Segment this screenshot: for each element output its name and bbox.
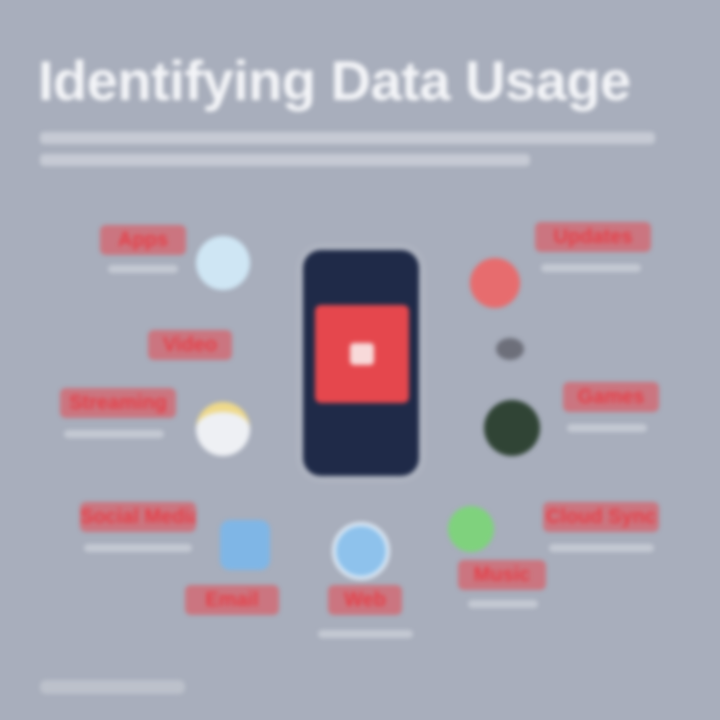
icon: blue square [220, 520, 270, 570]
label group left 3: Streaming [69, 392, 167, 414]
label group right 3 [540, 500, 662, 553]
icon: red app [315, 305, 409, 403]
label group bottom 2 [318, 582, 414, 639]
icon: small dark [496, 338, 524, 360]
icon: blue circle [332, 522, 390, 580]
icon: red circle [470, 258, 520, 308]
label group bottom 1: Email [205, 589, 259, 611]
label group right 2: Games [578, 386, 644, 408]
label group bottom 3: Music [474, 564, 530, 586]
subtitle [38, 130, 656, 168]
label group left 2: Video [163, 334, 217, 356]
icon: dark green [484, 400, 540, 456]
label group left 4 [77, 500, 199, 553]
title: Identifying Data Usage [38, 49, 631, 112]
icon: green [448, 506, 494, 552]
label group left 1 [98, 222, 188, 274]
label group right 2 [560, 380, 662, 433]
label group right 1: Updates [554, 226, 632, 248]
footer [40, 680, 185, 694]
phone [303, 250, 419, 476]
label group bottom 3 [456, 558, 548, 609]
label group right 1 [532, 220, 654, 273]
label group bottom 2: Web [344, 589, 386, 611]
label group right 3: Cloud Sync [546, 506, 656, 528]
label group left 1: Apps [118, 229, 168, 251]
label group left 3 [58, 386, 178, 439]
icon: light blue [196, 236, 250, 290]
icon: yellow white [196, 402, 250, 456]
